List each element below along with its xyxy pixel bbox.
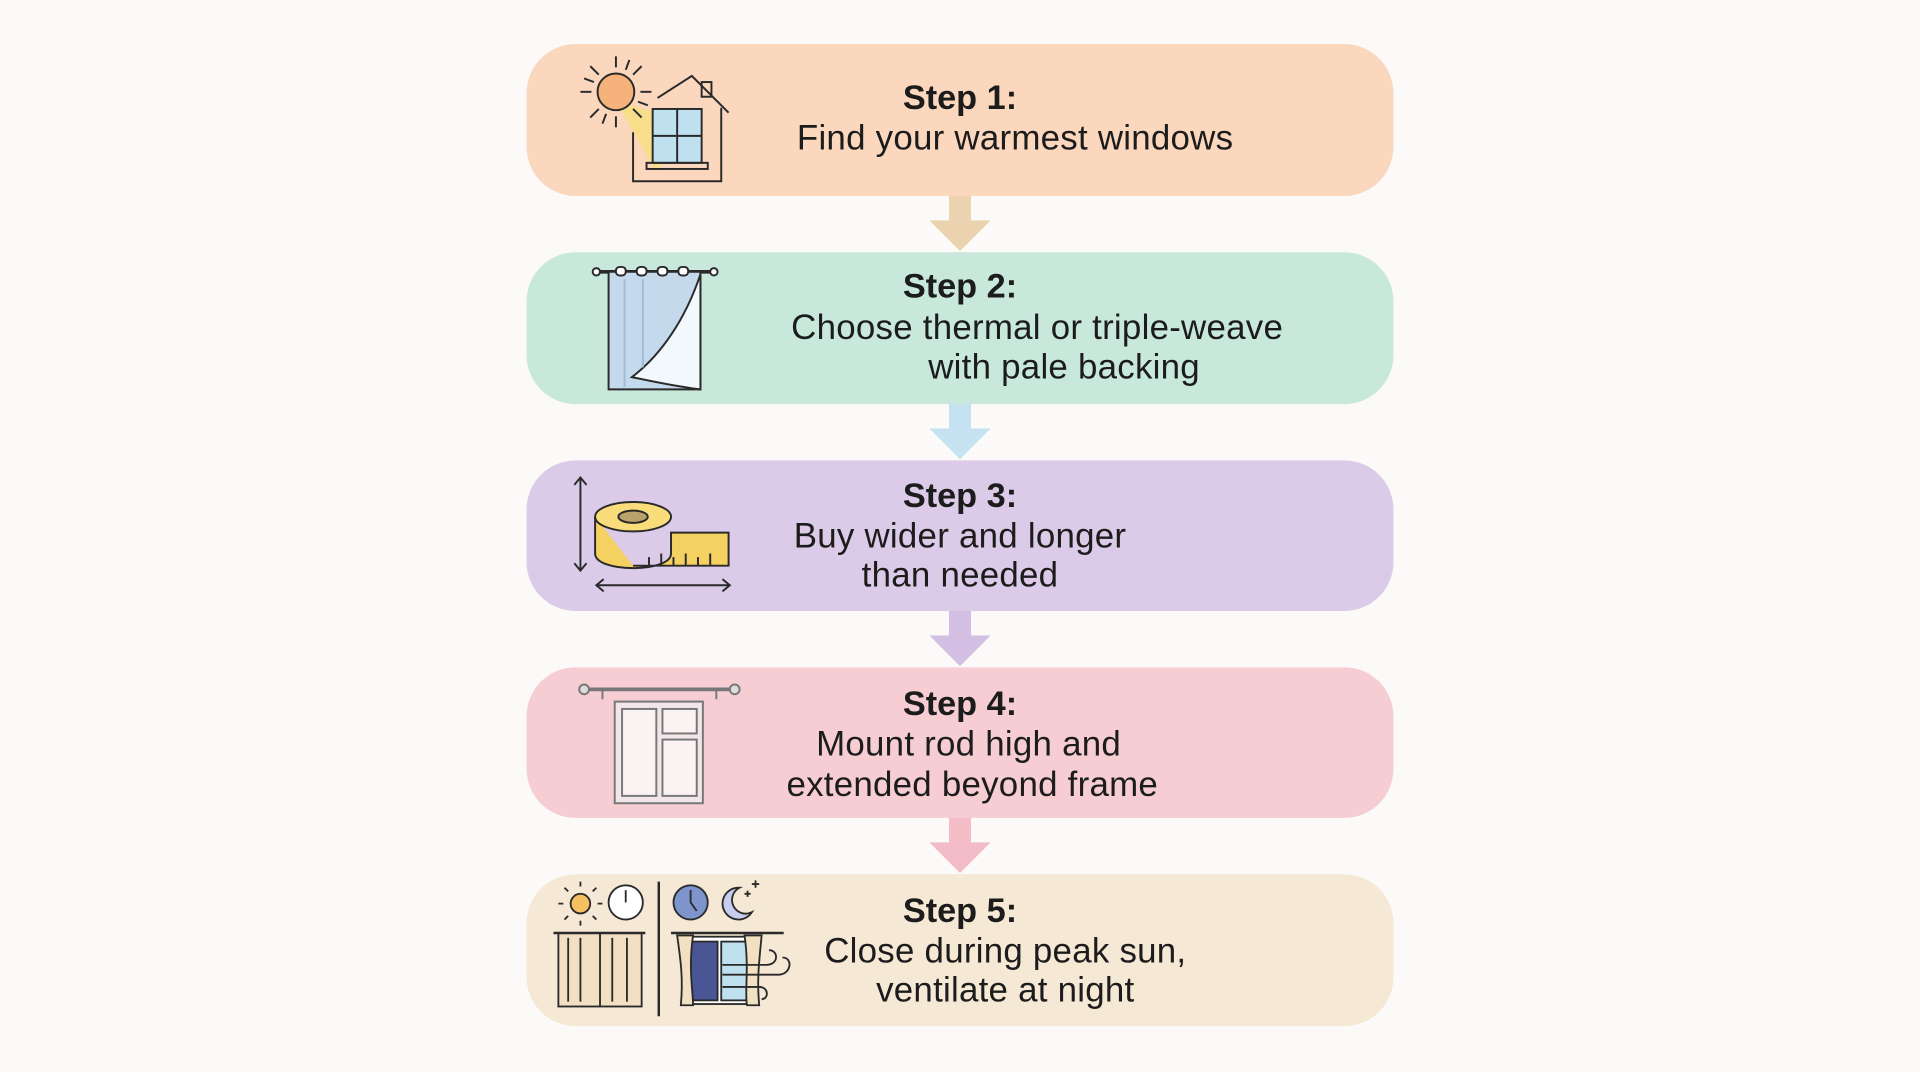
text: step 1: Find your warmest windows	[797, 118, 1233, 157]
text: step 4: Mount rod high and	[816, 724, 1121, 763]
text: step 2: with pale backing	[927, 347, 1200, 386]
text: step 2: Step 2:	[903, 268, 1017, 306]
icon: sun and house	[580, 56, 729, 181]
arrow: 2 to 3	[929, 402, 991, 459]
text: step 3: Buy wider and longer	[794, 516, 1126, 555]
arrow: 3 to 4	[929, 609, 991, 666]
text: step 4	[786, 685, 1158, 804]
text: step 5	[824, 892, 1186, 1010]
text: step 3: Step 3:	[903, 477, 1017, 515]
icon: curtain	[593, 267, 718, 389]
text: step 5: Step 5:	[903, 892, 1017, 930]
text: step 2	[791, 268, 1283, 386]
text: step 2: Choose thermal or triple-weave	[791, 308, 1283, 347]
panel: step 2	[527, 252, 1393, 404]
icon: day closed curtains / night ventilation	[553, 880, 789, 1016]
arrow: 1 to 2	[929, 193, 991, 251]
icon: rod and window	[579, 684, 740, 803]
arrow: 4 to 5	[929, 815, 991, 873]
panel: step 4	[527, 667, 1393, 818]
text: step 5: ventilate at night	[876, 971, 1135, 1010]
text: step 3	[794, 477, 1126, 595]
text: step 3: than needed	[862, 556, 1058, 595]
text: step 5: Close during peak sun,	[824, 931, 1186, 970]
text: step 1	[797, 79, 1233, 157]
icon: measuring tape	[574, 478, 730, 591]
text: step 4: Step 4:	[903, 685, 1017, 723]
text: step 4: extended beyond frame	[786, 765, 1158, 804]
panel: step 1	[527, 44, 1393, 196]
panel: step 5	[527, 874, 1393, 1026]
panel: step 3	[527, 460, 1393, 611]
text: step 1: Step 1:	[903, 79, 1017, 117]
